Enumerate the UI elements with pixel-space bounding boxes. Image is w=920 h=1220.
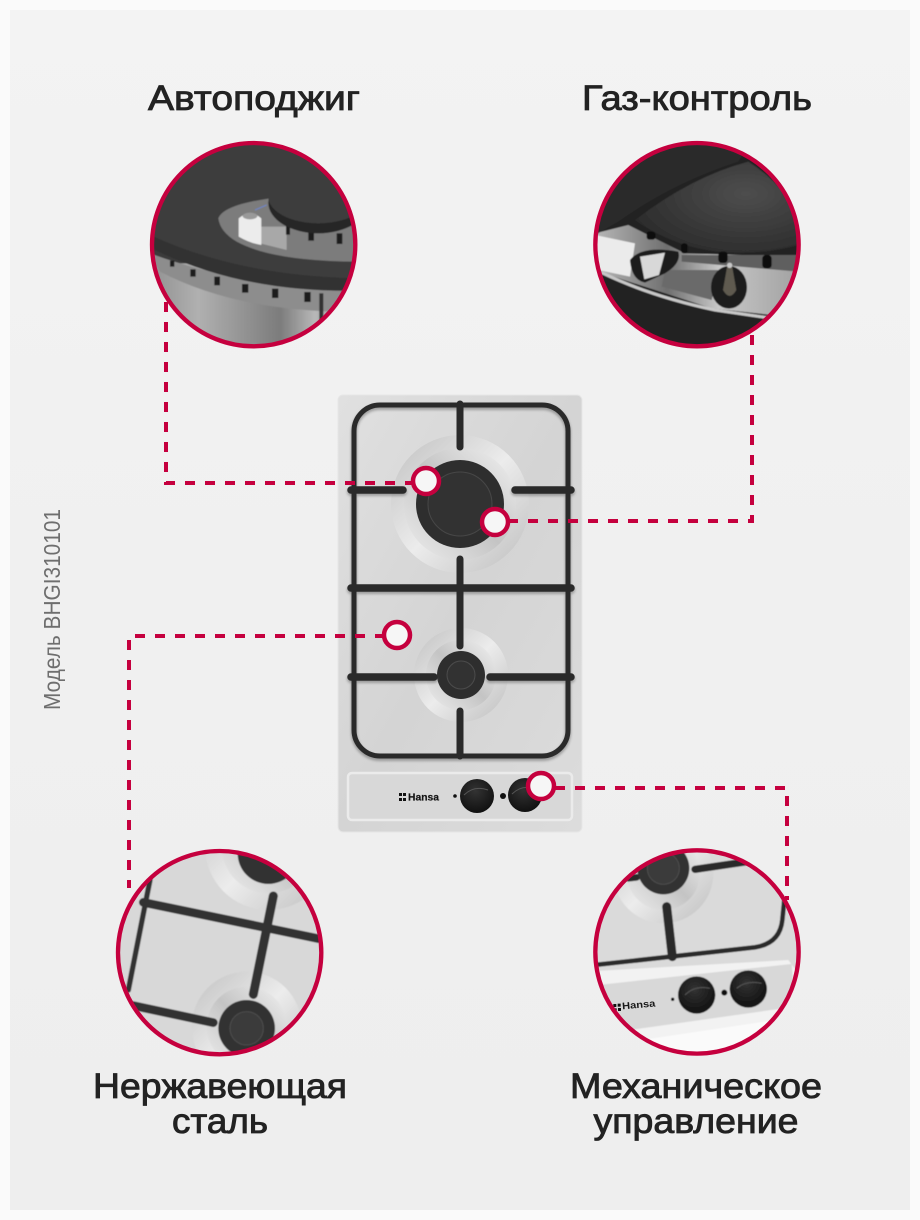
upper cap	[598, 232, 600, 234]
cast iron grate	[351, 404, 571, 756]
ring	[152, 143, 355, 346]
circle: mechanical control detail	[593, 848, 801, 1056]
inner recess	[218, 198, 360, 262]
knobs	[453, 778, 542, 813]
ring	[595, 850, 799, 1054]
dashed connectors	[129, 302, 787, 900]
heading: mechanical control: Механическое	[570, 1067, 822, 1106]
connector: autoignition	[166, 302, 414, 483]
burner	[218, 1000, 275, 1057]
electrode	[630, 250, 679, 283]
panel	[600, 960, 795, 1039]
brand logo: Hansa	[408, 792, 439, 804]
ring	[118, 851, 321, 1054]
circle: gas control detail	[593, 140, 801, 348]
dots	[671, 998, 674, 1001]
burner rings	[212, 860, 303, 905]
port notches	[647, 232, 772, 268]
heading: mechanical control: управление	[594, 1102, 798, 1141]
model label: Модель BHGI310101	[39, 509, 65, 710]
callout markers	[384, 468, 554, 799]
thermocouple	[711, 266, 747, 309]
connector: stainless steel	[129, 636, 385, 888]
steel lower body	[156, 262, 328, 344]
large burner	[391, 435, 529, 573]
control panel	[348, 773, 572, 820]
cast iron grate shadow	[351, 407, 571, 758]
burner rings	[620, 852, 711, 922]
heading: autoignition: Автоподжиг	[148, 79, 360, 118]
burner	[637, 853, 690, 895]
logo: Hansa	[622, 998, 657, 1012]
circle: stainless steel detail	[116, 848, 324, 1056]
ring	[595, 143, 799, 346]
heading: stainless steel: Нержавеющая	[93, 1067, 347, 1106]
grate bars	[128, 880, 318, 1023]
notches	[170, 261, 311, 302]
dome	[635, 162, 805, 253]
heading: gas control: Газ-контроль	[582, 79, 812, 118]
burner cap	[268, 200, 352, 234]
connector: gas control	[508, 335, 752, 521]
hob illustration	[338, 395, 582, 832]
hob steel plate	[338, 395, 582, 832]
connector: mechanical control	[555, 788, 787, 900]
ceramic electrode	[239, 213, 261, 245]
steel ring	[595, 225, 802, 315]
burner ring	[233, 262, 352, 279]
grate	[595, 862, 785, 965]
circle: autoignition detail	[150, 140, 358, 348]
knobs	[678, 976, 715, 1014]
logo	[613, 1002, 656, 1011]
heading: stainless steel: сталь	[172, 1102, 268, 1141]
small burner	[414, 628, 508, 722]
